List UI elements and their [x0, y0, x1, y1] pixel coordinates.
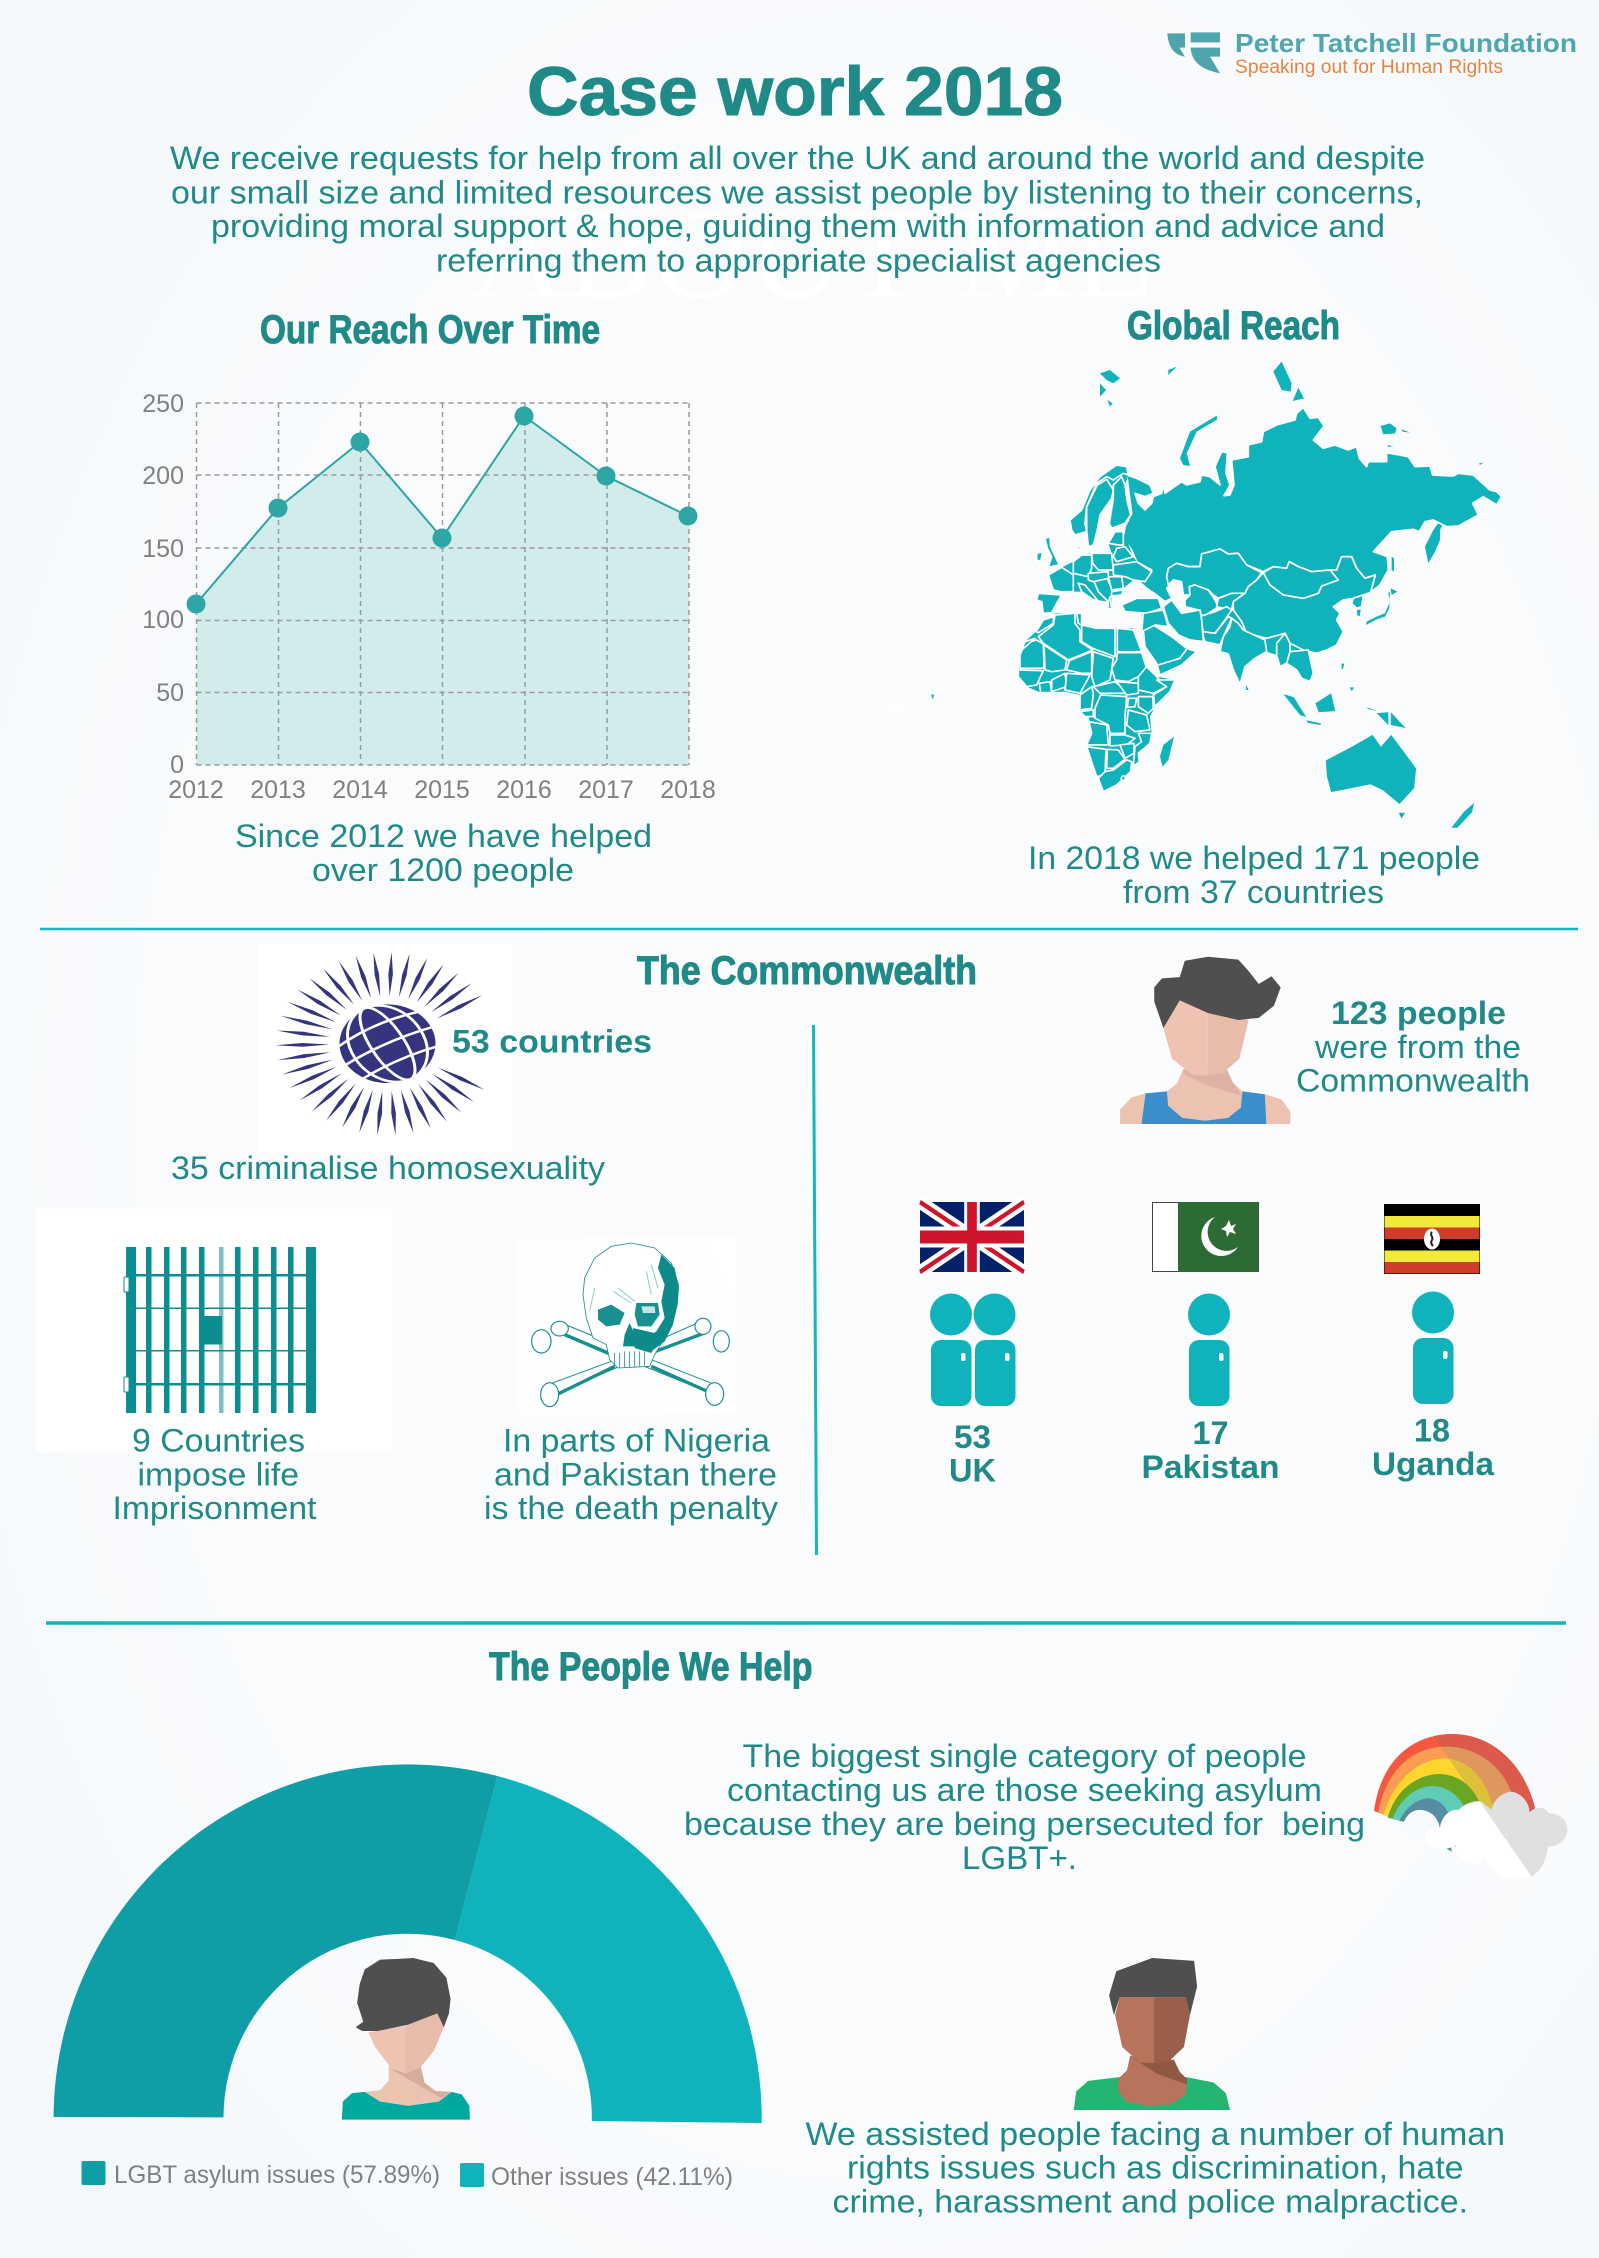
area line chart — [142, 390, 716, 804]
chart caption — [235, 818, 652, 888]
area line chart: 50 — [156, 679, 184, 707]
icon: prison bars — [36, 1208, 392, 1452]
area line chart: 200 — [142, 462, 184, 490]
heading: the commonwealth: The Commonwealth — [637, 949, 977, 993]
panel: global reach — [931, 304, 1502, 910]
stat: 53 UK: UK — [949, 1452, 997, 1488]
panel: our reach over time — [142, 308, 716, 888]
heading: global reach: Global Reach — [1127, 304, 1340, 348]
area line chart: 2013 — [250, 776, 306, 804]
icon: commonwealth logo — [257, 944, 512, 1152]
stat: 18 Uganda: 18 — [1414, 1412, 1450, 1448]
text: death penalty: In parts of Nigeria — [503, 1422, 771, 1458]
intro text: our small size and limited resources we assist people by listening to their concerns, — [171, 174, 1423, 210]
stat: 53 UK — [949, 1419, 997, 1488]
text: 123 people from the commonwealth: Commonwealth — [1296, 1062, 1530, 1098]
text: death penalty — [484, 1422, 779, 1526]
text: life imprisonment — [112, 1422, 316, 1526]
text: 123 people from the commonwealth: 123 people — [1331, 995, 1506, 1031]
stat column: Pakistan — [1142, 1202, 1280, 1485]
chart legend: Other issues (42.11%) — [491, 2163, 733, 2191]
title: Case work 2018 — [527, 53, 1063, 130]
area line chart: 2018 — [660, 776, 716, 804]
icon: one person — [1412, 1292, 1454, 1404]
icon: man in green top — [1074, 1958, 1230, 2110]
stat column: Uganda — [1372, 1204, 1495, 1482]
text: biggest single category: LGBT+. — [962, 1840, 1077, 1876]
stat: 18 Uganda — [1372, 1412, 1495, 1482]
text: biggest single category — [684, 1738, 1365, 1876]
area line chart: 250 — [142, 390, 184, 418]
area line chart: 2016 — [496, 776, 552, 804]
stat: 17 Pakistan: 17 — [1192, 1415, 1228, 1451]
heading: our reach over time: Our Reach Over Time — [260, 308, 600, 352]
logo: Peter Tatchell Foundation — [1167, 28, 1577, 78]
map region: Asia and Russia — [1100, 362, 1502, 690]
faint background watermark — [470, 185, 1153, 880]
semi-doughnut chart — [54, 1764, 762, 2123]
logo: Peter Tatchell Foundation: Peter Tatchell Foundation — [1235, 28, 1577, 58]
text: death penalty: is the death penalty — [484, 1490, 779, 1526]
map caption: In 2018 we helped 171 people — [1028, 840, 1480, 876]
icon: logo quotation mark — [1167, 32, 1220, 73]
icon: rainbow and cloud — [1374, 1734, 1567, 1879]
faint background watermark: ABOUT ME — [470, 185, 1153, 325]
text: life imprisonment: Imprisonment — [112, 1490, 316, 1526]
area line chart: 100 — [142, 606, 184, 634]
intro text: referring them to appropriate specialist agencies — [436, 242, 1161, 278]
text: biggest single category: because they are being persecuted for being — [684, 1806, 1365, 1842]
area line chart: 2012 — [168, 776, 224, 804]
icon: skull and crossbones — [518, 1238, 737, 1414]
chart caption: Since 2012 we have helped — [235, 818, 652, 854]
chart legend: LGBT asylum issues (57.89%) — [114, 2161, 440, 2189]
stat: 35 criminalise: 35 criminalise homosexuality — [171, 1150, 606, 1186]
intro text — [170, 140, 1425, 278]
text: death penalty: and Pakistan there — [494, 1456, 777, 1492]
logo: Peter Tatchell Foundation: Speaking out for Human Rights — [1235, 57, 1503, 78]
icon: man in blue vest — [1120, 957, 1290, 1124]
intro text: We receive requests for help from all over the UK and around the world and despite — [170, 140, 1425, 176]
text: biggest single category: contacting us are those seeking asylum — [727, 1772, 1322, 1808]
text: life imprisonment: impose life — [138, 1456, 299, 1492]
icon: two people — [930, 1294, 1016, 1406]
icon: Pakistan flag — [1152, 1202, 1258, 1272]
chart caption: over 1200 people — [312, 852, 574, 888]
map caption: from 37 countries — [1123, 874, 1384, 910]
area line chart: 150 — [142, 535, 184, 563]
area line chart: 2014 — [332, 776, 388, 804]
icon: woman — [342, 1958, 470, 2120]
map region: Oceania and islands — [931, 664, 1474, 828]
heading: the people we help: The People We Help — [489, 1645, 812, 1689]
stat: 17 Pakistan — [1142, 1415, 1280, 1485]
stat: 18 Uganda: Uganda — [1372, 1446, 1495, 1482]
panel: the people we help — [54, 1645, 1567, 2220]
intro text: providing moral support & hope, guiding them with information and advice and — [211, 208, 1385, 244]
icon: Uganda flag — [1384, 1204, 1480, 1274]
area line chart: 2017 — [578, 776, 634, 804]
text: biggest single category: The biggest single category of people — [742, 1738, 1306, 1774]
text: 123 people from the commonwealth — [1296, 995, 1530, 1098]
map region: Europe and Africa — [1018, 465, 1249, 792]
text: 123 people from the commonwealth: were from the — [1314, 1029, 1521, 1065]
map caption — [1028, 840, 1480, 910]
stat: 53 countries: 53 countries — [452, 1024, 652, 1060]
text: other human rights issues: We assisted people facing a number of human — [806, 2116, 1505, 2152]
stat: 53 UK: 53 — [954, 1419, 991, 1455]
panel: the commonwealth — [36, 944, 1530, 1555]
text: other human rights issues: rights issues such as discrimination, hate — [847, 2150, 1464, 2186]
stat: 17 Pakistan: Pakistan — [1142, 1449, 1280, 1485]
icon: UK flag — [920, 1202, 1024, 1272]
text: other human rights issues — [806, 2116, 1505, 2220]
stat column: UK — [920, 1202, 1024, 1488]
area line chart: 2015 — [414, 776, 470, 804]
chart legend — [82, 2161, 733, 2191]
icon: one person — [1188, 1294, 1230, 1406]
text: other human rights issues: crime, harassment and police malpractice. — [832, 2184, 1468, 2220]
text: life imprisonment: 9 Countries — [132, 1422, 305, 1458]
map: eastern hemisphere — [931, 362, 1502, 828]
area line chart: 0 — [170, 751, 184, 779]
